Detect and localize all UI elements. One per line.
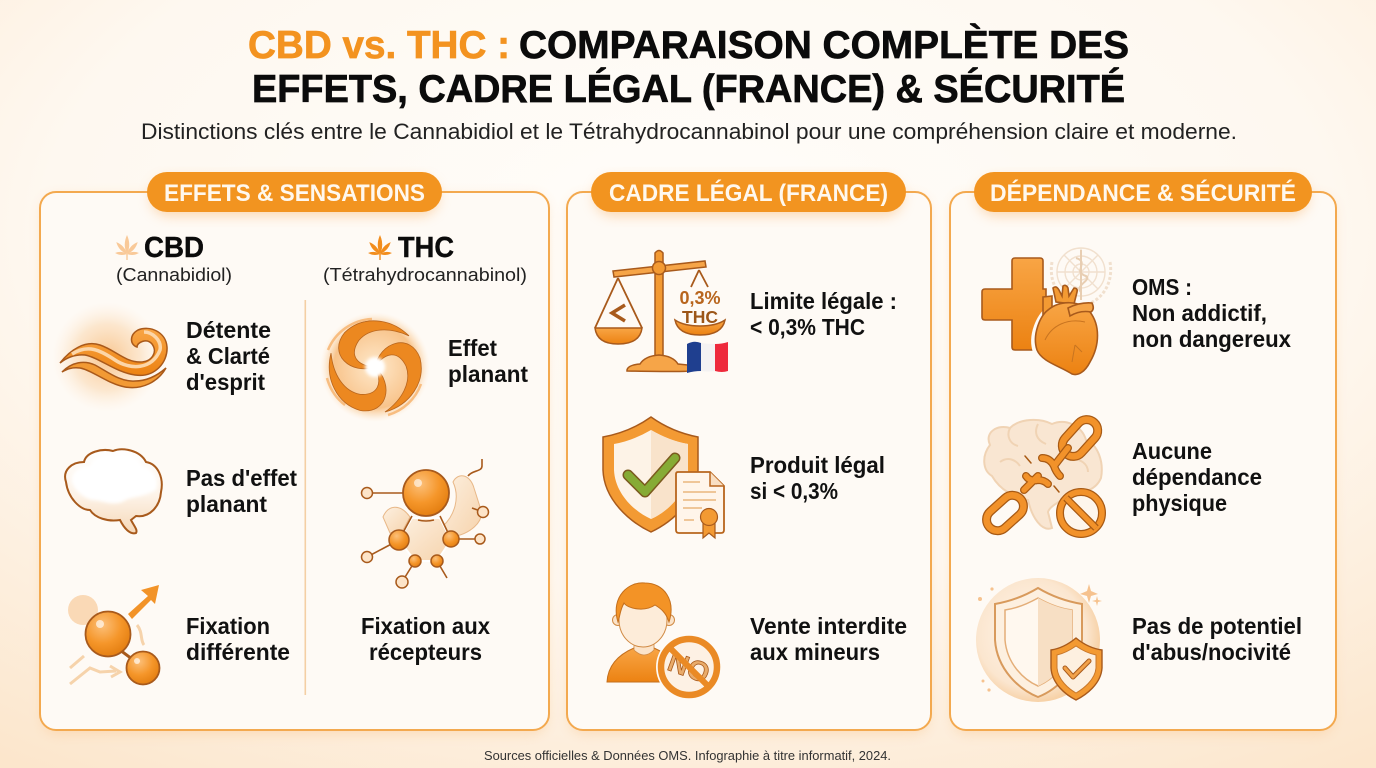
- icon: medical cross: [982, 258, 1046, 350]
- column header: CBD: CBD: [144, 232, 204, 264]
- icon: scales: 0,3%: [679, 288, 721, 308]
- column header: CBD: [115, 232, 232, 285]
- heading pill: cadre legal: [591, 172, 906, 212]
- text: vente interdite: Vente interdite: [750, 613, 907, 639]
- text: vente interdite: [750, 613, 907, 665]
- heading pill: effets: EFFETS & SENSATIONS: [164, 180, 425, 207]
- text: aucune dependance: [1132, 438, 1262, 516]
- column header: CBD: (Cannabidiol): [116, 264, 232, 285]
- text: detente: d'esprit: [186, 369, 265, 395]
- title: [248, 23, 1129, 111]
- text: aucune dependance: physique: [1132, 490, 1227, 516]
- text: pas d'effet planant: Pas d'effet: [186, 465, 297, 491]
- text: vente interdite: aux mineurs: [750, 639, 880, 665]
- icon: prohibition sign: [1060, 492, 1102, 534]
- text: aucune dependance: Aucune: [1132, 438, 1212, 464]
- text: fixation aux recepteurs: [361, 613, 490, 665]
- text: OMS: OMS :: [1132, 274, 1192, 300]
- title: CBD vs. THC :: [248, 24, 510, 67]
- heading pill: effets: [147, 172, 442, 212]
- text: pas d'effet planant: planant: [186, 491, 267, 517]
- text: OMS: non dangereux: [1132, 326, 1291, 352]
- icon: scales: [595, 250, 725, 372]
- icon: brain cloud: [65, 449, 162, 533]
- text: limite legale: < 0,3% THC: [750, 314, 865, 340]
- icon: molecule with arrow: [68, 585, 160, 684]
- icon: scales: THC: [682, 307, 718, 327]
- title: EFFETS, CADRE LÉGAL (FRANCE) & SÉCURITÉ: [252, 67, 1125, 111]
- icon: shields in orb: [976, 578, 1102, 702]
- text: pas d'effet planant: [186, 465, 297, 517]
- column header: THC: [323, 232, 527, 285]
- icon: person with prohibition: NO: [664, 646, 714, 689]
- text: detente: & Clarté: [186, 343, 270, 369]
- text: effet planant: [448, 335, 528, 387]
- text: detente: Détente: [186, 317, 271, 343]
- text: fixation aux recepteurs: Fixation aux: [361, 613, 490, 639]
- column header: THC: THC: [398, 232, 454, 264]
- icon: heart: [1034, 285, 1098, 374]
- text: effet planant: planant: [448, 361, 528, 387]
- footer sources: Sources officielles & Données OMS. Infographie à titre informatif, 2024.: [484, 748, 891, 763]
- icon: person with prohibition: [607, 583, 722, 700]
- text: fixation differente: [186, 613, 290, 665]
- column header: THC: (Tétrahydrocannabinol): [323, 264, 527, 285]
- text: fixation differente: Fixation: [186, 613, 270, 639]
- icon: shield with check and document: [603, 417, 724, 538]
- icon: molecule receptor: [362, 459, 488, 588]
- panel: dependance et securite: [950, 172, 1336, 734]
- text: produit legal: Produit légal: [750, 452, 885, 478]
- text: pas de potentiel: d'abus/nocivité: [1132, 639, 1291, 665]
- icon: pale brain: [984, 420, 1102, 529]
- panel: effets et sensations: [40, 172, 549, 734]
- text: limite legale: [750, 288, 897, 340]
- subtitle: Distinctions clés entre le Cannabidiol et le Tétrahydrocannabinol pour une compréhension claire et moderne.: [141, 119, 1237, 144]
- icon: wave: [52, 302, 167, 412]
- panel: cadre legal: [567, 172, 931, 734]
- text: effet planant: Effet: [448, 335, 497, 361]
- heading pill: dependance: [974, 172, 1312, 212]
- heading pill: dependance: DÉPENDANCE & SÉCURITÉ: [990, 179, 1296, 207]
- text: fixation aux recepteurs: récepteurs: [369, 639, 482, 665]
- text: OMS: Non addictif,: [1132, 300, 1267, 326]
- text: produit legal: [750, 452, 885, 504]
- text: produit legal: si < 0,3%: [750, 478, 838, 504]
- text: aucune dependance: dépendance: [1132, 464, 1262, 490]
- text: detente: [186, 317, 271, 395]
- icon: french flag: [687, 342, 728, 373]
- title: COMPARAISON COMPLÈTE DES: [519, 23, 1129, 67]
- text: limite legale: Limite légale :: [750, 288, 897, 314]
- icon: broken chain: [982, 415, 1102, 535]
- text: pas de potentiel: Pas de potentiel: [1132, 613, 1302, 639]
- text: pas de potentiel: [1132, 613, 1302, 665]
- heading pill: cadre legal: CADRE LÉGAL (FRANCE): [609, 179, 888, 207]
- text: OMS: [1132, 274, 1291, 352]
- icon: WHO emblem: [1051, 248, 1111, 305]
- icon: spiral: [313, 304, 430, 422]
- text: fixation differente: différente: [186, 639, 290, 665]
